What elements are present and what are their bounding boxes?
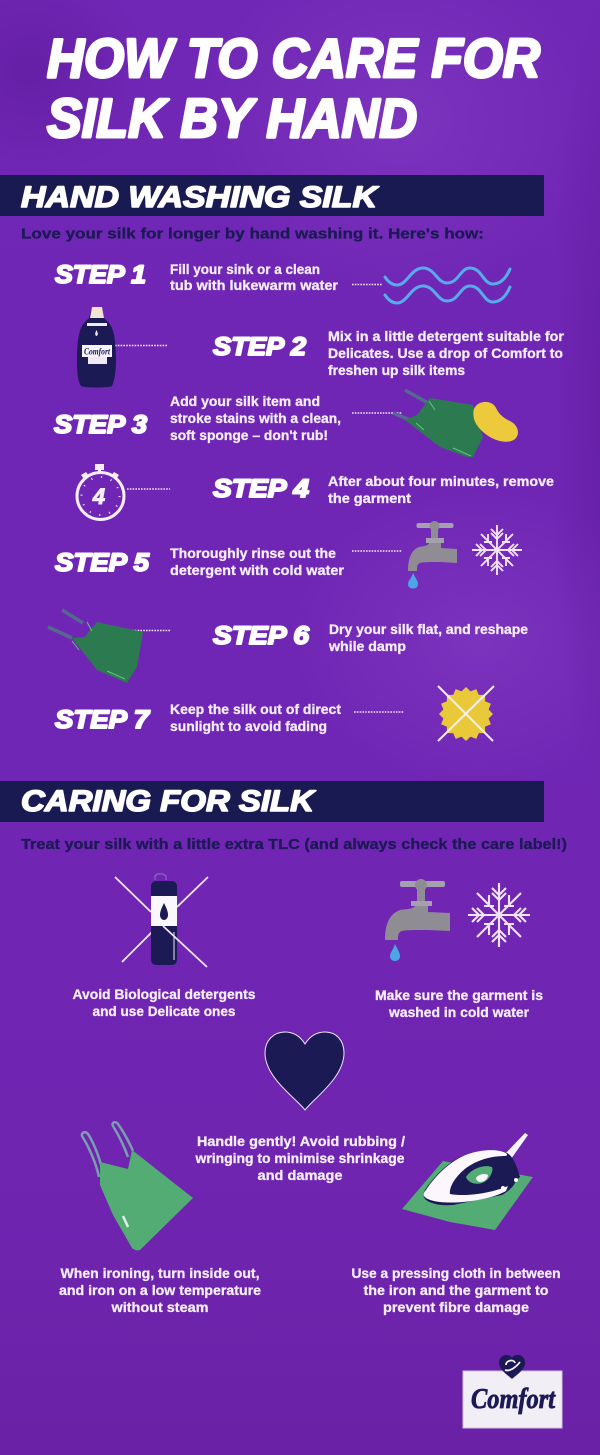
- step 3: [54, 390, 518, 457]
- step 7: Keep the silk out of direct: [170, 702, 342, 717]
- logo: comfort: [463, 1355, 562, 1428]
- step 5: [55, 521, 522, 588]
- section heading: caring for silk: [0, 781, 544, 822]
- step 1: tub with lukewarm water: [170, 278, 339, 293]
- icon: water waves: [385, 268, 510, 303]
- section heading: caring for silk: CARING FOR SILK: [21, 785, 317, 818]
- step 6: STEP 6: [213, 622, 310, 650]
- step 1: STEP 1: [55, 261, 146, 289]
- icon: iron on pressing cloth: [402, 1133, 533, 1230]
- step 7: STEP 7: [55, 706, 150, 734]
- step 3: soft sponge – don't rub!: [170, 428, 328, 443]
- step 6: [48, 610, 528, 683]
- step 1: Fill your sink or a clean: [170, 262, 320, 277]
- icon: snowflake: [472, 525, 522, 575]
- step 2: Delicates. Use a drop of Comfort to: [328, 346, 563, 361]
- step 5: detergent with cold water: [170, 563, 345, 578]
- tip: pressing cloth: [352, 1133, 560, 1315]
- step 3: STEP 3: [54, 411, 147, 439]
- tip: avoid biological detergents: Avoid Biological detergents: [72, 987, 256, 1002]
- title: SILK BY HAND: [47, 87, 417, 149]
- step 7: [55, 686, 494, 741]
- step 6: Dry your silk flat, and reshape: [329, 622, 528, 637]
- step 2: freshen up silk items: [328, 363, 465, 378]
- tip: handle gently: wringing to minimise shrinkage: [194, 1151, 405, 1166]
- icon: green camisole: [82, 1122, 193, 1250]
- tip: ironing inside out: [59, 1122, 262, 1315]
- tip: avoid biological detergents: [72, 874, 256, 1019]
- section heading: hand washing silk: HAND WASHING SILK: [21, 181, 380, 214]
- title: HOW TO CARE FOR: [47, 27, 540, 89]
- tip: ironing inside out: When ironing, turn inside out,: [60, 1266, 260, 1281]
- step 1: [55, 261, 510, 303]
- icon: stopwatch: 4: [92, 484, 105, 509]
- icon: stopwatch: [77, 464, 124, 520]
- intro text: hand washing: Love your silk for longer by hand washing it. Here's how:: [21, 226, 484, 242]
- intro text: caring: Treat your silk with a little extra TLC (and always check the care label!): [21, 836, 567, 853]
- step 6: while damp: [328, 639, 406, 654]
- icon: comfort bottle: [77, 307, 116, 388]
- tip: ironing inside out: and iron on a low temperature: [59, 1283, 262, 1298]
- icon: comfort bottle: Comfort: [84, 346, 110, 356]
- icon: tap and drop: [385, 879, 450, 961]
- tip: handle gently: and damage: [258, 1168, 343, 1183]
- logo: comfort: Comfort: [471, 1384, 556, 1415]
- tip: avoid biological detergents: and use Delicate ones: [92, 1004, 236, 1019]
- tip: cold water: washed in cold water: [388, 1005, 530, 1020]
- tip: handle gently: [194, 1134, 405, 1183]
- icon: crossed-out sun: [438, 686, 494, 741]
- step 2: [77, 307, 565, 388]
- step 5: Thoroughly rinse out the: [170, 546, 337, 561]
- tip: pressing cloth: the iron and the garment to: [364, 1283, 548, 1298]
- step 5: STEP 5: [55, 549, 150, 577]
- tip: pressing cloth: prevent fibre damage: [383, 1300, 530, 1315]
- icon: green garment: [48, 610, 143, 683]
- icon: tap and drop: [408, 521, 457, 588]
- tip: handle gently: Handle gently! Avoid rubbing /: [197, 1134, 405, 1149]
- section heading: hand washing silk: [0, 175, 544, 216]
- step 3: stroke stains with a clean,: [170, 411, 341, 426]
- step 3: Add your silk item and: [170, 394, 320, 409]
- title: [47, 27, 540, 149]
- icon: heart: [265, 1032, 344, 1110]
- tip: ironing inside out: without steam: [110, 1300, 208, 1315]
- step 4: [77, 464, 555, 520]
- icon: snowflake: [468, 883, 530, 947]
- tip: pressing cloth: Use a pressing cloth in between: [352, 1266, 560, 1281]
- icon: green garment with sponge: [393, 390, 518, 457]
- step 4: STEP 4: [213, 475, 309, 503]
- icon: crossed-out bottle: [115, 874, 208, 967]
- step 7: sunlight to avoid fading: [170, 719, 327, 734]
- step 2: Mix in a little detergent suitable for: [328, 329, 565, 344]
- step 2: STEP 2: [213, 333, 306, 361]
- tip: cold water: [375, 879, 543, 1020]
- tip: cold water: Make sure the garment is: [375, 988, 543, 1003]
- step 4: the garment: [328, 491, 412, 506]
- step 4: After about four minutes, remove: [328, 474, 555, 489]
